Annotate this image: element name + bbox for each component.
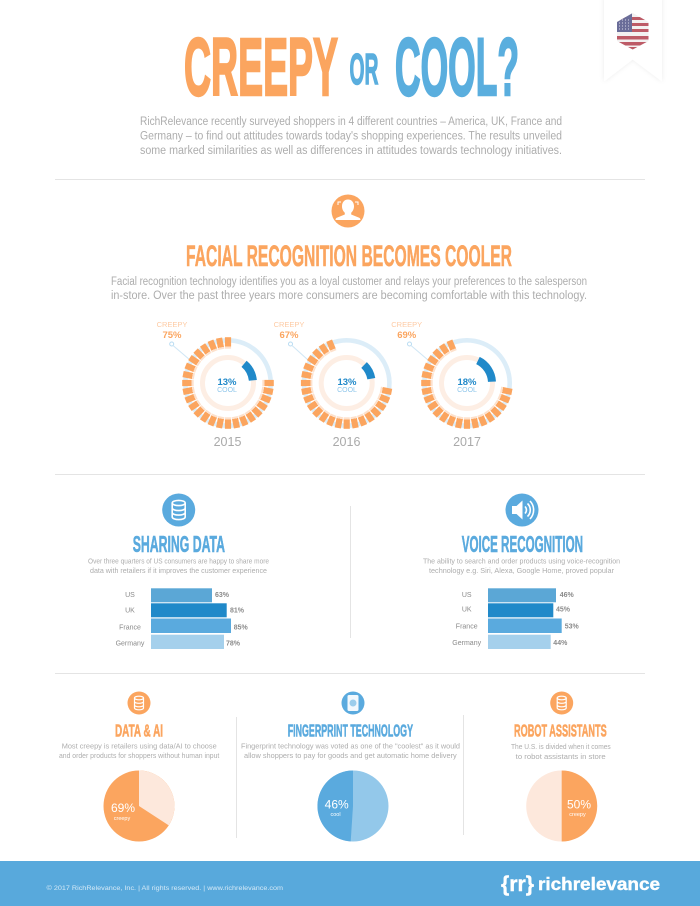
panel: sharing data: [88, 494, 269, 649]
bar chart: France: [456, 624, 478, 630]
pie chart: creepy: [569, 812, 586, 818]
chart: 2017 ring: 18%: [457, 377, 477, 388]
icon: database: [128, 692, 150, 714]
description: allow shoppers to pay for goods and get automatic home delivery: [244, 751, 457, 760]
description: and order products for shoppers without human input: [59, 751, 220, 760]
title: OR: [350, 45, 378, 94]
panel: data and AI: [59, 692, 220, 842]
pie chart: 50%: [567, 798, 591, 812]
bar chart: France: [119, 624, 141, 632]
description: Over three quarters of US consumers are happy to share more: [88, 556, 269, 566]
panel: robot assistants: [511, 692, 611, 842]
chart: 2017 ring: COOL: [457, 387, 477, 394]
chart: 2015 ring: COOL: [217, 387, 237, 394]
panel: fingerprint technology: [241, 692, 460, 842]
intro text: RichRelevance recently surveyed shoppers in 4 different countries – America, UK, France and: [140, 116, 562, 128]
description: [111, 276, 587, 302]
icon: US flag hexagon: [617, 13, 648, 50]
description: The U.S. is divided when it comes: [511, 742, 611, 751]
bar chart: 44%: [553, 640, 568, 647]
bar chart: 81%: [230, 608, 245, 614]
chart: 2016 ring: 13%: [337, 377, 357, 388]
bar chart: 85%: [234, 624, 248, 632]
text: COOL?: [395, 22, 519, 113]
heading: SHARING DATA: [133, 531, 225, 557]
copyright text: © 2017 RichRelevance, Inc. | All rights reserved. | www.richrelevance.com: [46, 884, 283, 892]
heading: DATA & AI: [115, 721, 163, 741]
description: Most creepy is retailers using data/AI to choose: [62, 742, 217, 750]
chart: 2016 ring: 2016: [333, 435, 360, 449]
description: data with retailers if it improves the customer experience: [90, 566, 267, 575]
chart: 2016 ring: 67%: [279, 330, 299, 341]
description: [511, 742, 611, 761]
pie chart: cool: [330, 812, 341, 818]
bar chart: 53%: [565, 624, 579, 630]
description: to robot assistants in store: [516, 752, 606, 761]
bar chart: 78%: [226, 640, 241, 648]
heading: ROBOT ASSISTANTS: [514, 721, 607, 741]
logo: [501, 873, 660, 896]
bar chart: US: [462, 592, 472, 599]
bar chart: UK: [462, 606, 472, 614]
chart: 2016 ring: CREEPY: [274, 320, 304, 329]
description: [59, 742, 220, 760]
description: in-store. Over the past three years more consumers are becoming comfortable with this technology.: [111, 290, 587, 302]
chart: 2017 ring: 2017: [453, 435, 481, 449]
icon: phone fingerprint: [342, 692, 364, 714]
panel: voice recognition: [423, 494, 620, 649]
chart: 2015 ring: 13%: [217, 377, 237, 388]
footer: [0, 861, 700, 906]
ribbon with US flag: [604, 0, 662, 82]
chart: 2016 ring: COOL: [337, 387, 357, 394]
logo: richrelevance: [538, 874, 660, 894]
icon: face: [332, 194, 364, 228]
icon: database: [162, 494, 195, 526]
bar chart: Germany: [452, 640, 482, 647]
description: Fingerprint technology was voted as one of the "coolest" as it would: [241, 742, 460, 750]
icon: database: [550, 692, 573, 714]
description: Facial recognition technology identifies you as a loyal customer and relays your preferences to the salesperson: [111, 276, 587, 288]
bar chart: US: [125, 592, 135, 599]
description: [88, 556, 269, 575]
pie chart: [526, 770, 597, 842]
bar chart: 63%: [215, 592, 230, 599]
title: CREEPY: [184, 22, 338, 113]
chart: 2015 ring: [157, 320, 274, 449]
chart: 2015 ring: 75%: [162, 330, 182, 341]
logo: {rr}: [501, 873, 534, 896]
bar chart: [452, 588, 579, 649]
chart: 2015 ring: CREEPY: [157, 320, 187, 329]
chart: 2016 ring: [274, 320, 392, 449]
bar chart: [116, 588, 248, 649]
pie chart: 69%: [111, 801, 135, 815]
pie chart: 46%: [325, 798, 349, 812]
bar chart: Germany: [116, 640, 145, 648]
description: The ability to search and order products using voice-recognition: [423, 556, 620, 566]
chart: 2017 ring: 69%: [397, 330, 417, 341]
intro text: some marked similarities as well as differences in attitudes towards technology initiatives.: [140, 145, 562, 157]
description: [241, 742, 460, 760]
intro text: [140, 116, 562, 157]
heading: FINGERPRINT TECHNOLOGY: [288, 721, 413, 741]
icon: speaker: [506, 494, 538, 526]
bar chart: 45%: [556, 606, 571, 614]
heading: VOICE RECOGNITION: [462, 531, 583, 557]
description: [423, 556, 620, 575]
panel: facial recognition: [111, 194, 587, 449]
intro text: Germany – to find out attitudes towards today's shopping experiences. The results unveiled: [140, 130, 562, 142]
bar chart: 46%: [560, 592, 574, 599]
pie chart: [104, 770, 174, 842]
description: technology e.g. Siri, Alexa, Google Home, proved popular: [429, 566, 614, 575]
chart: 2015 ring: 2015: [214, 435, 241, 449]
bar chart: UK: [125, 608, 135, 614]
chart: 2017 ring: CREEPY: [391, 320, 422, 329]
pie chart: creepy: [114, 816, 131, 822]
chart: 2017 ring: [391, 320, 513, 449]
pie chart: [317, 770, 388, 842]
